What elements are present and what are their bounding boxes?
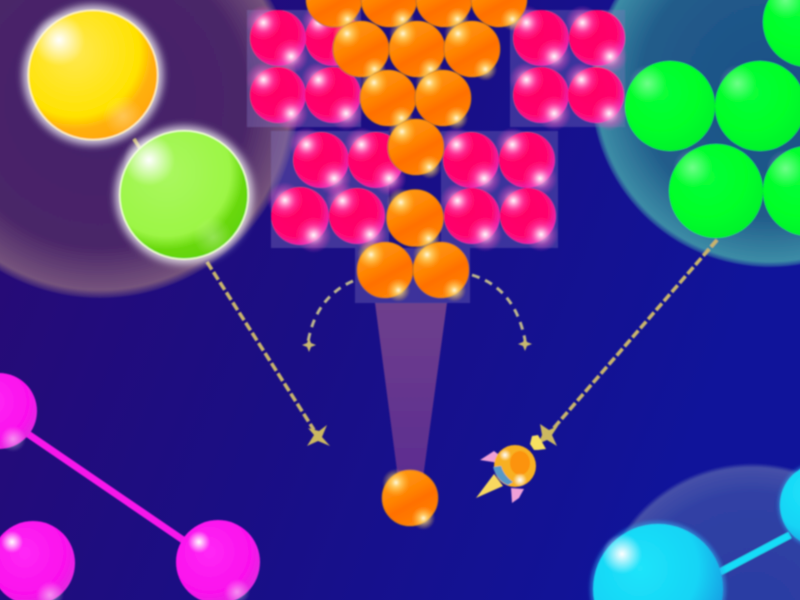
lime glowing ball	[115, 126, 253, 264]
magenta ball left lower	[0, 521, 75, 600]
star: left arc end	[302, 338, 316, 352]
panel: middle left pink block	[271, 131, 389, 248]
glow circle: bottom right	[597, 463, 800, 600]
arrow: left dashed trajectory	[207, 262, 314, 430]
glow circle: top right	[591, 0, 800, 267]
connector between yellow and green balls	[134, 139, 141, 150]
pink bubbles: upper right	[509, 5, 628, 131]
rocket fins	[480, 451, 503, 463]
arrow: right dashed trajectory	[552, 240, 717, 430]
rocket nose arrow	[530, 435, 546, 450]
pink bubbles: upper left	[246, 5, 364, 131]
rocket body	[494, 445, 536, 487]
panel: upper right pink block	[510, 10, 625, 127]
orange shooter bubble	[382, 469, 438, 530]
green bubble cluster	[625, 0, 800, 238]
rocket lower fin	[511, 488, 524, 503]
panel: lower orange block	[355, 248, 470, 303]
star: right arc end	[518, 337, 532, 351]
rocket cone flame	[476, 474, 503, 498]
yellow glowing ball	[23, 5, 163, 145]
cyan ball right	[778, 461, 800, 549]
panel: middle right pink block	[441, 131, 558, 248]
rocket orange spot	[510, 451, 530, 475]
rocket band	[493, 466, 513, 485]
cyan connector line	[720, 535, 790, 572]
beam	[375, 303, 447, 478]
cyan ball left	[590, 521, 726, 600]
glow circle: top left	[0, 0, 298, 298]
pink bubbles: middle left	[267, 127, 407, 253]
orange bubble cluster	[306, 0, 527, 302]
rocket	[476, 435, 546, 503]
magenta connector line	[28, 434, 186, 542]
arrow head: left star	[307, 425, 330, 446]
pink bubbles: middle right	[439, 127, 559, 252]
dashed arc right	[472, 275, 525, 340]
rocket highlights	[499, 449, 527, 487]
arrow head: right star	[538, 424, 558, 446]
magenta ball right	[176, 520, 260, 600]
panel: upper left pink block	[247, 10, 361, 127]
dashed arc left	[308, 281, 353, 342]
magenta ball left upper	[0, 373, 37, 452]
